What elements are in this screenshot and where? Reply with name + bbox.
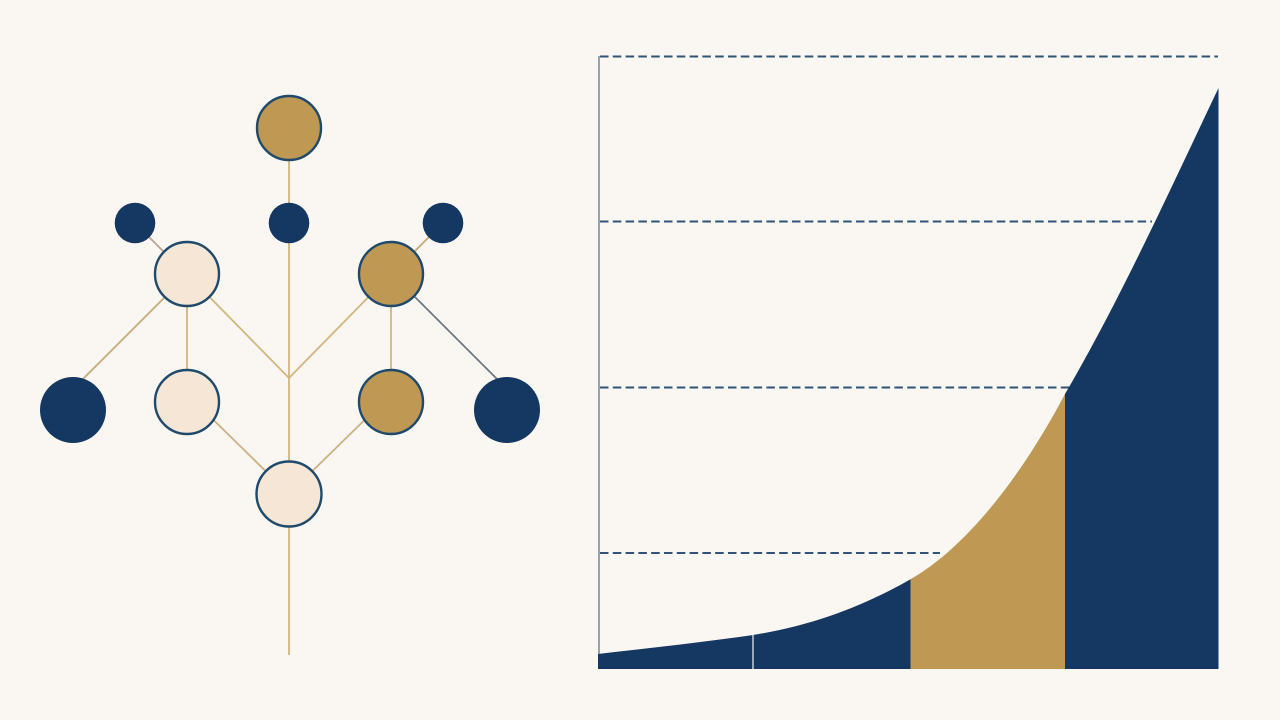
area segment: gold xyxy=(910,393,1066,669)
tree network diagram xyxy=(40,96,540,655)
connecting lines xyxy=(73,128,507,655)
y axis xyxy=(598,56,600,655)
node: middle gold right xyxy=(359,370,423,434)
area segment: navy low xyxy=(598,579,911,669)
node: large navy right xyxy=(474,377,540,443)
node: large navy left xyxy=(40,377,106,443)
node: small navy center xyxy=(269,203,309,243)
node: upper cream left xyxy=(155,242,219,306)
node: top gold xyxy=(257,96,321,160)
node: small navy right xyxy=(423,203,463,243)
dashed gridlines xyxy=(600,56,1218,553)
segment divider xyxy=(752,635,754,669)
node: middle cream left xyxy=(155,370,219,434)
area segment: navy high xyxy=(1065,88,1218,669)
node: small navy left xyxy=(115,203,155,243)
exponential area chart xyxy=(598,56,1218,669)
node: upper gold right xyxy=(359,242,423,306)
node: bottom cream xyxy=(256,462,322,526)
